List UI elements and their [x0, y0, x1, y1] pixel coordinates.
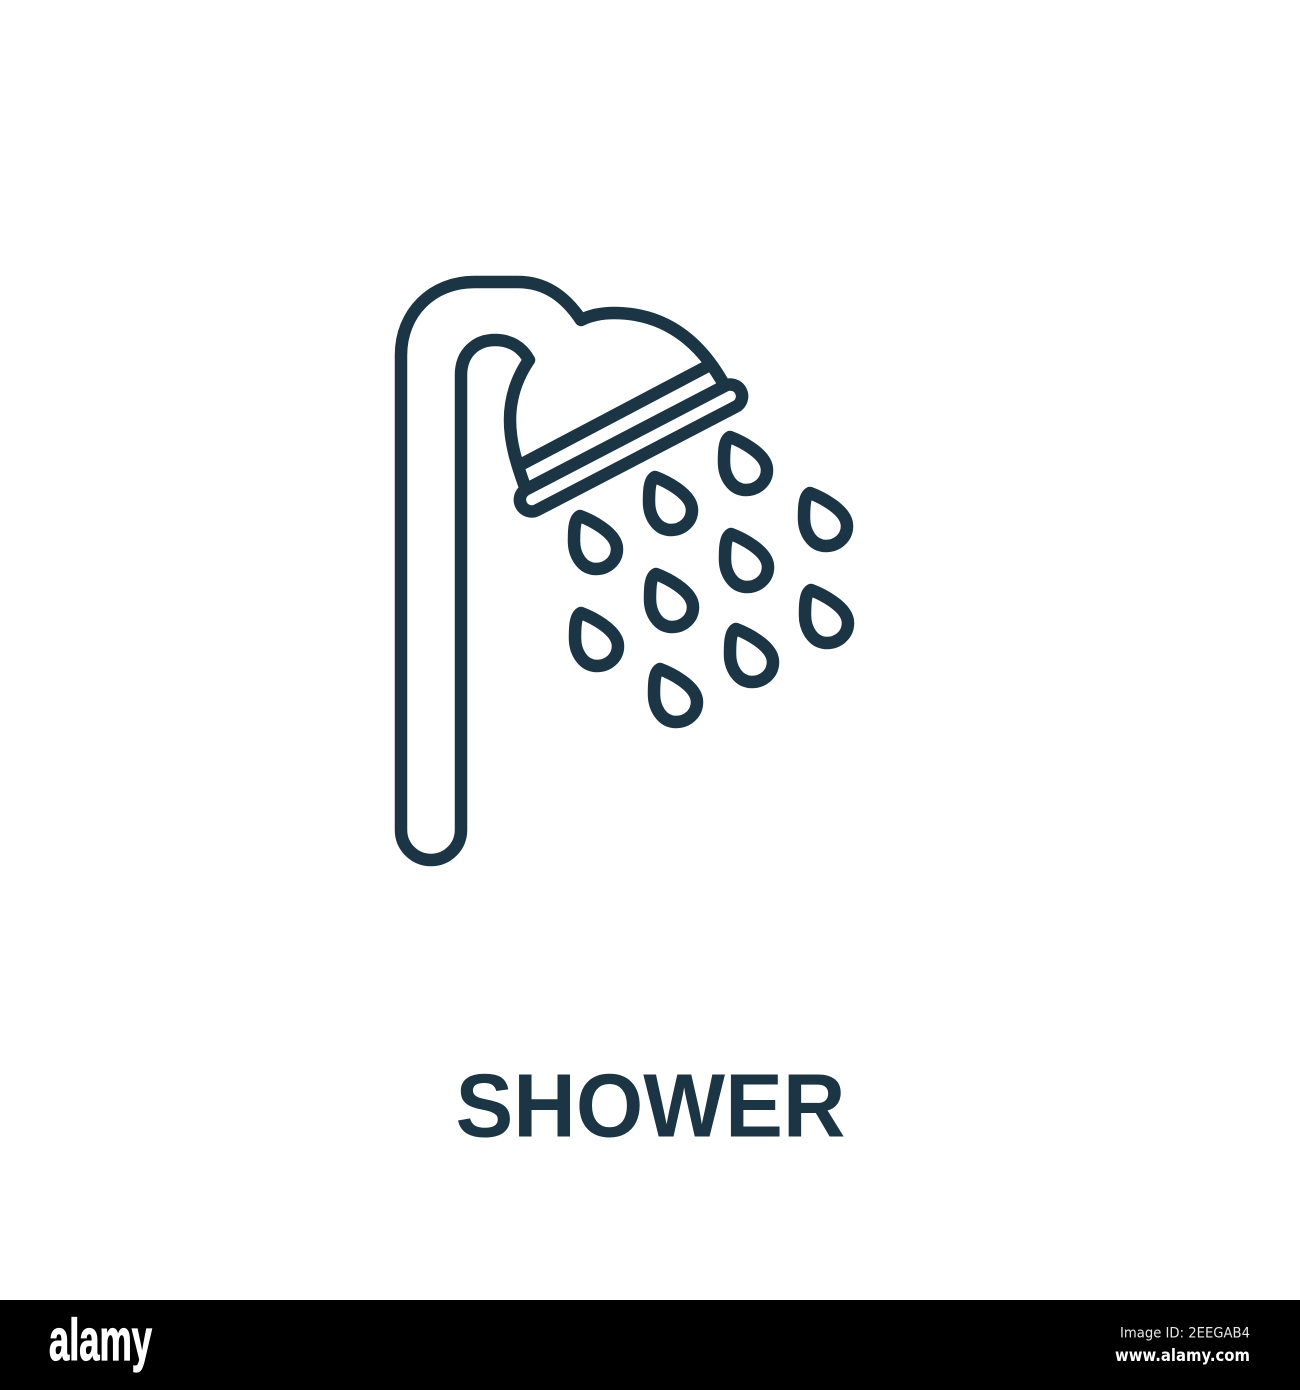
icon: water drop 7 [575, 613, 618, 666]
icon: water drop 2 [649, 477, 692, 530]
icon: shower head rim capsule [516, 380, 746, 516]
icon: water drop 5 [725, 534, 768, 587]
icon: shower [401, 282, 848, 860]
icon: water drop 4 [804, 493, 847, 546]
icon: water drop 9 [730, 629, 773, 682]
icon: shower head rim line [522, 367, 706, 464]
icon: shower pipe and head outline [401, 282, 722, 860]
footer image id: Image ID: 2EEGAB4 [1120, 1326, 1250, 1342]
footer bar [0, 1300, 1300, 1390]
icon: water drop 10 [654, 669, 697, 722]
footer logo: alamy [49, 1308, 152, 1373]
icon: water drop 6 [650, 574, 693, 627]
icon: water drop 8 [805, 590, 848, 643]
title: SHOWER [456, 1056, 846, 1156]
footer website: www.alamy.com [1115, 1346, 1250, 1366]
icon: water drop 1 [724, 437, 767, 490]
icon: water drop 3 [574, 516, 617, 569]
